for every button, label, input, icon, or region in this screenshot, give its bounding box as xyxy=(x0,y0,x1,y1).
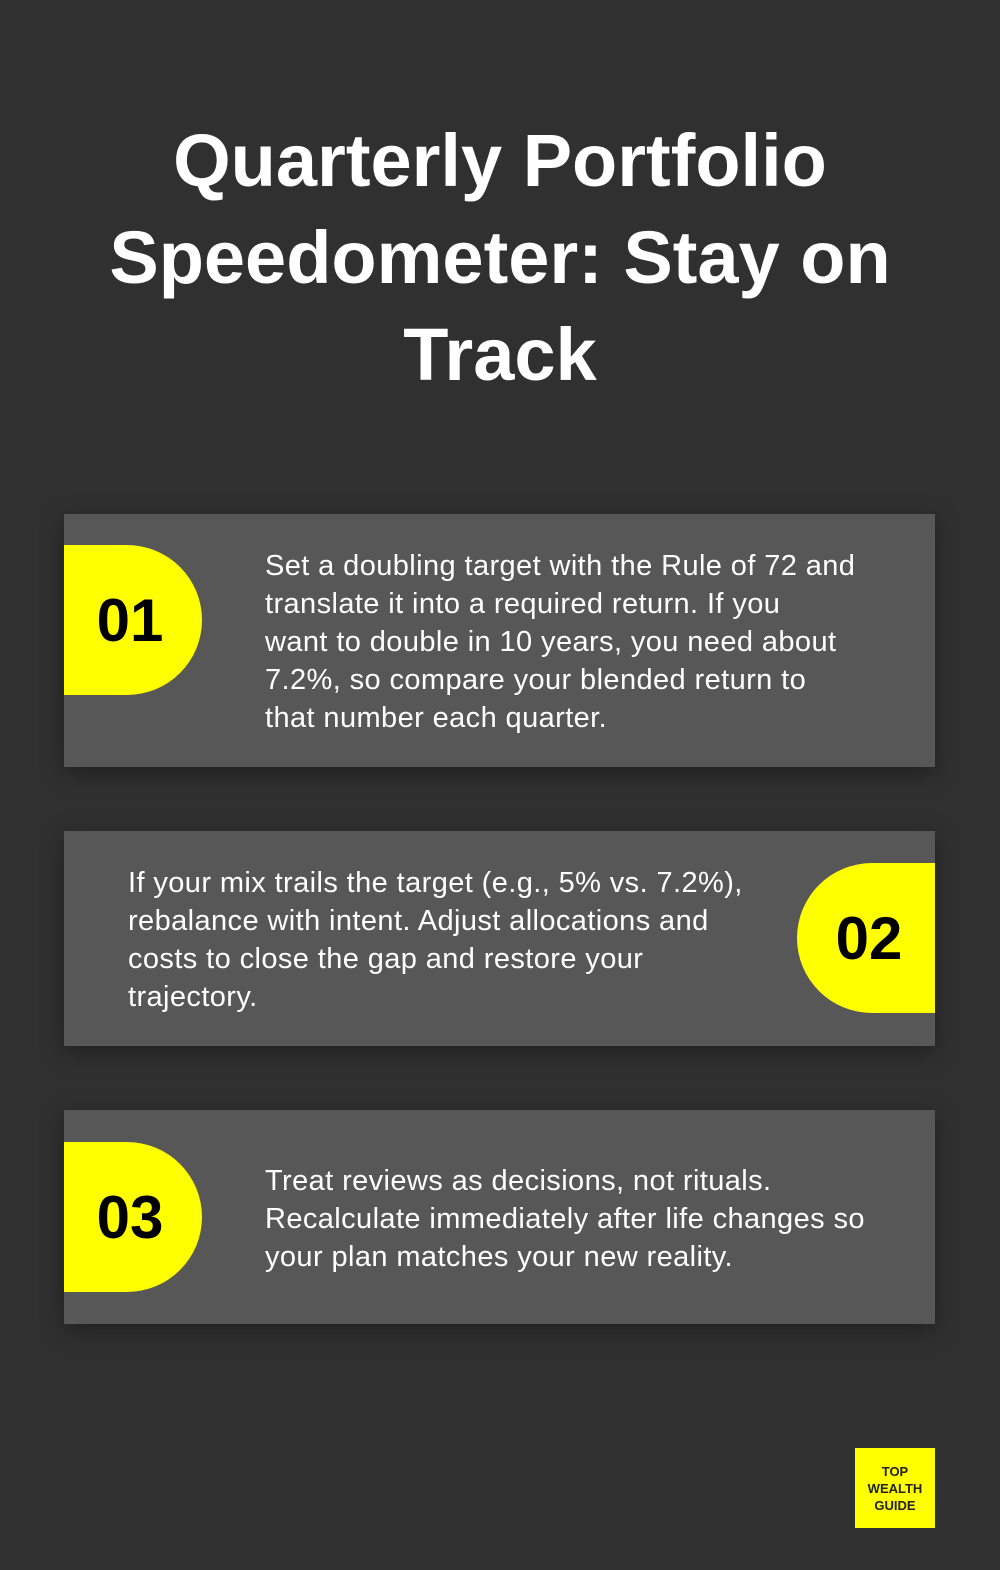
text 01: translate it into a required return. If you xyxy=(265,588,780,620)
text 01: 7.2%, so compare your blended return to xyxy=(265,664,806,696)
badge 02 xyxy=(797,863,935,1013)
badge 01 xyxy=(64,545,202,695)
badge 03 xyxy=(64,1142,202,1292)
text 02: trajectory. xyxy=(128,981,258,1013)
badge 02: 02 xyxy=(836,904,902,972)
text 01: Set a doubling target with the Rule of 72 and xyxy=(265,550,855,582)
text 02 xyxy=(128,867,743,1013)
text 03: your plan matches your new reality. xyxy=(265,1241,733,1273)
text 02: rebalance with intent. Adjust allocations and xyxy=(128,905,709,937)
title: Quarterly Portfolio xyxy=(173,119,827,202)
panel: step 03 xyxy=(64,1110,935,1324)
logo: TOP xyxy=(882,1464,908,1478)
title: Speedometer: Stay on xyxy=(109,216,891,299)
text 03 xyxy=(265,1165,865,1273)
title: Track xyxy=(403,313,597,396)
text 02: If your mix trails the target (e.g., 5% vs. 7.2%), xyxy=(128,867,743,899)
badge 01: 01 xyxy=(97,586,163,654)
logo xyxy=(855,1448,935,1528)
text 01: want to double in 10 years, you need about xyxy=(265,626,836,658)
panel: step 02 xyxy=(64,831,935,1046)
text 03: Treat reviews as decisions, not rituals. xyxy=(265,1165,772,1197)
panel: step 01 xyxy=(64,514,935,767)
title xyxy=(109,119,891,396)
text 01 xyxy=(265,550,855,734)
badge 03: 03 xyxy=(97,1184,163,1250)
text 02: costs to close the gap and restore your xyxy=(128,943,643,975)
logo: GUIDE xyxy=(874,1498,916,1512)
logo: WEALTH xyxy=(868,1480,922,1496)
text 03: Recalculate immediately after life changes so xyxy=(265,1203,865,1235)
text 01: that number each quarter. xyxy=(265,702,607,734)
